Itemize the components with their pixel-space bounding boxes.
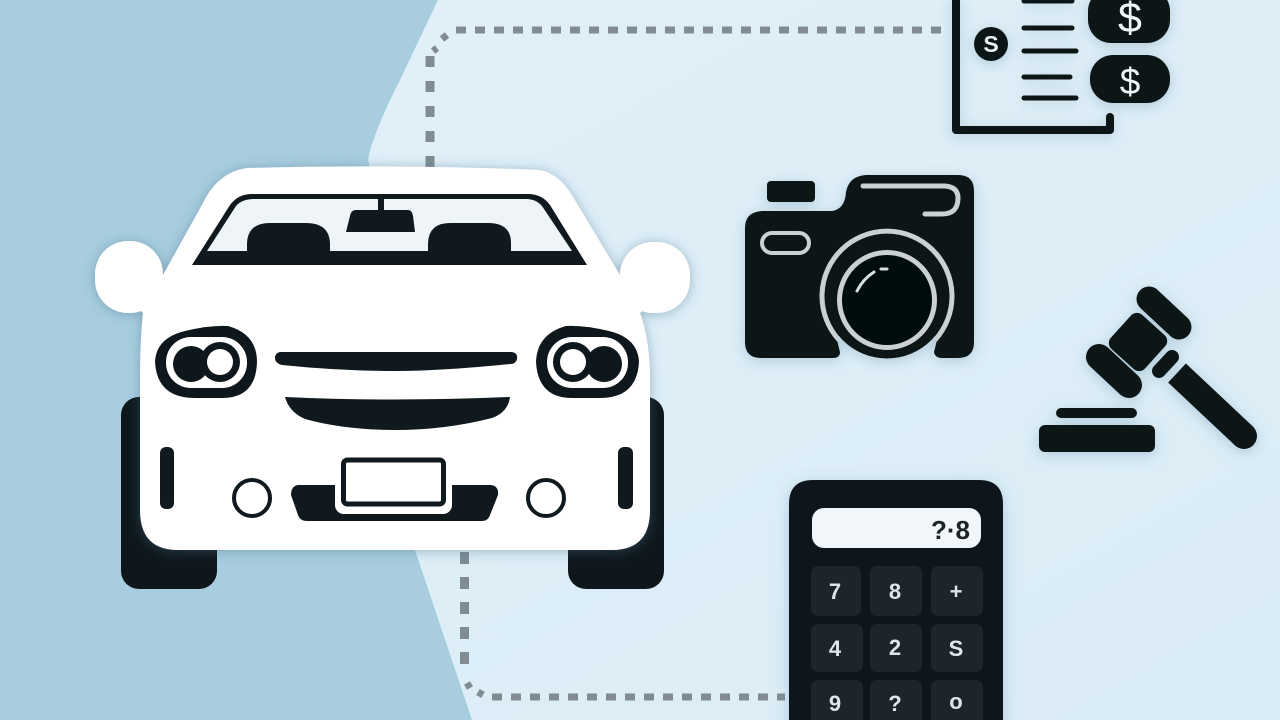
- lens: [822, 231, 952, 358]
- dollar pill: bottom: $: [1120, 61, 1140, 102]
- top panel highlight: [863, 186, 958, 214]
- left tire: [121, 397, 217, 589]
- license plate: [335, 452, 452, 514]
- gavel head: [1106, 310, 1170, 374]
- rear-view mirror: [346, 198, 415, 232]
- keypad labels: 9: [829, 691, 841, 716]
- car body: [95, 166, 690, 550]
- keypad labels: 8: [889, 579, 901, 604]
- dashed connector: bottom: [464, 552, 785, 697]
- gavel handle: [1177, 373, 1244, 436]
- keypad labels: +: [950, 579, 962, 604]
- flash window: [762, 233, 809, 253]
- sound block base: [1039, 425, 1155, 452]
- lower bumper intake: [291, 485, 498, 521]
- right tire: [568, 397, 664, 589]
- dollar coin: S: [983, 31, 999, 57]
- text lines: [1024, 1, 1076, 98]
- windshield: [192, 194, 587, 265]
- left fog light: [234, 480, 270, 516]
- background: blue left panel: [0, 0, 472, 720]
- dashed connector: top: [430, 30, 950, 167]
- keypad labels: ?: [888, 691, 902, 716]
- right headlight: [536, 326, 639, 398]
- left side marker: [160, 447, 174, 509]
- lower grille: [285, 397, 510, 430]
- icon: camera: [745, 175, 974, 358]
- sound block top: [1056, 408, 1137, 418]
- dollar pill: bottom: [1090, 55, 1170, 103]
- right seat: [428, 223, 511, 252]
- camera body: [745, 175, 974, 358]
- icon: car front view: [95, 166, 690, 589]
- left seat: [247, 223, 330, 252]
- keypad labels: S: [949, 636, 963, 661]
- left headlight: [155, 326, 257, 398]
- keypad labels: 7: [829, 579, 841, 604]
- display: [812, 508, 981, 548]
- keypad labels: o: [949, 689, 963, 714]
- keypad labels: [829, 579, 963, 716]
- dollar pill: top: [1088, 0, 1170, 43]
- viewfinder: [767, 181, 815, 202]
- right side marker: [618, 447, 633, 509]
- gavel neck: [1159, 357, 1172, 371]
- gavel top band: [1149, 299, 1179, 327]
- gavel bottom band: [1099, 357, 1129, 385]
- keypad labels: 4: [829, 636, 842, 661]
- keypad buttons: [811, 566, 983, 720]
- dollar coin: [974, 27, 1008, 61]
- icon: calculator: [789, 480, 1003, 720]
- calculator body: [789, 480, 1003, 720]
- icon: gavel: [1039, 299, 1257, 452]
- keypad labels: 2: [889, 635, 901, 660]
- icon: bill with dollar signs: [956, 0, 1170, 130]
- display: ?·8: [931, 515, 970, 545]
- upper grille: [275, 352, 517, 371]
- document outline: [956, 0, 1110, 130]
- right fog light: [528, 480, 564, 516]
